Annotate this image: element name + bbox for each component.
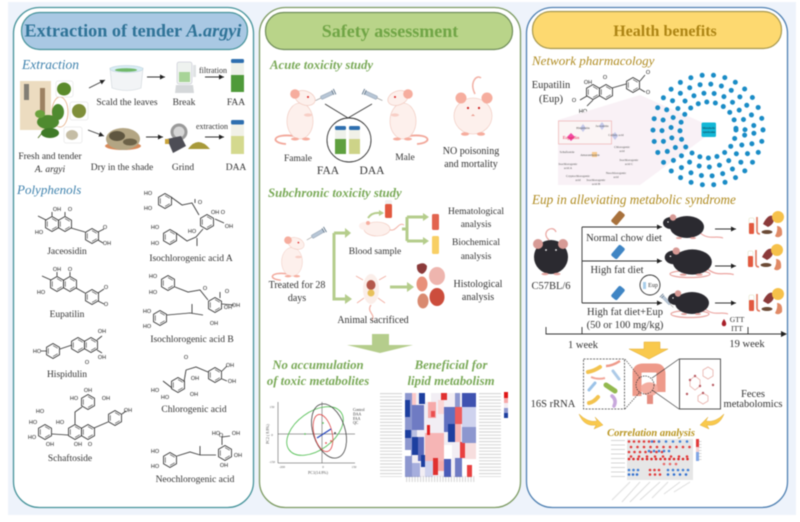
molecule: schaftoside: OH [46,442,54,448]
chart: PCA score plot: 150 [270,405,275,409]
chart: correlation heatmap [612,439,700,502]
molecule: isochlorogenic acid B: Isochlorogenic acid B [150,335,234,345]
label: histological analysis: analysis [462,292,494,303]
molecule: hispidulin: OH [98,355,106,361]
icon: intestine [636,368,661,404]
label: DAA: DAA [360,165,385,177]
label: eupatilin [532,80,571,105]
arrow: to blender [147,76,165,78]
label: hematological analysis: Hematological [448,207,504,217]
molecule: schaftoside: HO [28,435,37,441]
heatmap legend [504,392,508,418]
label: extraction with arrow [196,122,228,137]
chart: PCA score plot: 150 [352,465,357,469]
network: target rings [653,75,763,185]
molecule: eupatilin: OH [53,267,61,273]
molecule: jaceosidin: Jaceosidin [47,247,87,257]
network: highlighted eupatilin box [558,121,612,144]
molecule: isochlorogenic acid B: HO [149,290,158,296]
icon: male rat with syringe [362,88,427,144]
chart: PCA score plot: FAA [353,417,361,421]
network: compound nodes: Neochlorogenic [606,171,627,175]
molecule: schaftoside: OH [102,396,110,402]
label: high fat diet + Eup: (50 or 100 mg/kg) [587,320,664,331]
icon: dried leaves [105,128,141,150]
vial: DAA [231,120,244,154]
label: high fat diet + Eup: High fat diet+Eup [587,307,663,318]
chart: PCA score plot [265,397,365,475]
label: no poisoning: and mortality [444,159,498,170]
label: male: Male [395,153,415,163]
molecule: neochlorogenic acid: O [219,433,224,439]
network: compound nodes: acid [613,175,619,179]
network: compound nodes: acid [619,149,625,153]
heading pill: extraction [22,12,248,50]
molecule: eupatilin structure: O [646,90,651,96]
network: central hub: Metabolic [703,126,716,130]
network: compound nodes: acid [575,178,581,182]
molecule: chlorogenic acid: Chlorogenic acid [161,405,227,415]
label: FAA: FAA [317,165,340,177]
icon: organs [416,263,445,308]
network: central hub: syndrome [703,130,716,134]
molecule: isochlorogenic acid B: O [225,289,230,295]
molecule: isochlorogenic acid B: OH [224,305,232,311]
label: grind: Grind [172,163,194,173]
molecule: schaftoside: HO [36,409,45,415]
molecule: isochlorogenic acid B: HO [143,324,152,330]
label: famale: Famale [284,154,312,164]
label: fresh and tender: A. argyi [34,165,65,175]
chart: PCA score plot: DAA [353,412,361,416]
subheading: correlation analysis: Correlation analysis [607,428,695,439]
lines to vial circle [325,104,372,118]
label: animal sacrificed: Animal sacrificed [337,315,409,326]
molecule: chlorogenic acid: OH [191,376,199,382]
molecule: schaftoside: HO [56,420,65,426]
molecule: schaftoside [28,388,132,464]
subheading: lipid metabolism: lipid metabolism [407,374,495,388]
network: central hub [702,122,716,137]
icon: magnifier Eup and syringe [640,275,675,309]
icon: dissected rat [356,274,386,320]
icon: magnifier Eup and syringe: Eup [648,283,658,289]
molecule: jaceosidin: HO [35,230,44,236]
molecule: jaceosidin: OH [103,241,111,247]
chart: PCA score plot: PC1(14.8%) [308,470,329,475]
arrow: to scald [89,80,105,88]
label: high fat diet + Eup [587,307,664,331]
molecule: isochlorogenic acid A: HO [188,229,197,235]
arrow: to dry [88,130,104,136]
molecule: eupatilin structure: HO [579,109,588,115]
label: 1 week: 1 week [568,340,599,351]
chart: PCA score plot: Control [353,408,365,412]
icon: grinder and powder [165,124,210,153]
label: treated for 28 days: Treated for 28 [269,280,325,291]
subheading: no accumulation: No accumulation [271,358,364,372]
network: compound nodes: acid C [625,162,633,166]
chart: PCA score plot: -200 [279,465,285,469]
icon: female rat with syringe [276,88,336,144]
network: compound nodes [559,122,639,186]
label: no poisoning: NO poisoning [443,146,499,157]
icon: blood sample rat [359,221,404,236]
icon: blender [175,62,196,93]
icon: healthy mouse front [454,77,492,136]
label: biochemical analysis: analysis [461,252,492,262]
molecule: chlorogenic acid: HO [151,388,160,394]
heading pill: safety [266,12,512,50]
molecule: chlorogenic acid [151,355,236,415]
label: break: Break [173,98,196,108]
molecule: schaftoside: OH [74,442,82,448]
network: compound nodes: Schaftoside [560,150,575,154]
icon: treated rat with syringe [272,227,326,280]
label: FAA: FAA [227,98,245,108]
molecule: eupatilin: HO [37,290,46,296]
diet arrows [582,227,662,303]
tube: hematological [432,214,439,230]
molecule: isochlorogenic acid B: HO [149,274,158,280]
molecule: jaceosidin [35,207,111,257]
label: biochemical analysis [452,238,500,262]
label: extraction with arrow: extraction [196,122,228,131]
molecule: neochlorogenic acid: OH [232,431,240,437]
heading pill: health [532,12,782,48]
heading pill: extraction: Extraction of tender A.argyi [25,20,241,40]
network: compound nodes: Jaceosidin [595,124,609,128]
label: feces metabolomics: Feces [741,389,765,400]
label: 19 week: 19 week [729,339,765,350]
molecule: chlorogenic acid: OH [190,392,198,398]
arrow: to grinder [146,136,163,138]
icon: C57BL/6 mouse [533,229,568,275]
circle with FAA and DAA vials [327,118,371,162]
label: DAA: DAA [226,163,246,173]
box: metabolite molecules [680,359,720,409]
label: 16S rRNA: 16S rRNA [531,399,576,410]
icon: brown pill [611,210,625,226]
molecule: eupatilin: O [68,267,73,273]
subheading: no accumulation: of toxic metabolites [267,374,369,388]
molecule: hispidulin: OH [98,329,106,335]
chart: PCA score plot: 0 [271,433,273,437]
molecule: isochlorogenic acid A: OH [225,224,233,230]
arrow: curved yellow right [700,414,724,429]
label: feces metabolomics [724,389,782,410]
molecule: isochlorogenic acid A: O [198,200,203,206]
label: fresh and tender [18,152,82,175]
icon: scalding pot [110,66,143,90]
subheading: subchronic toxicity: Subchronic toxicity study [268,186,402,200]
subheading: no accumulation [267,358,369,388]
heading pill: health: Health benefits [613,23,717,40]
molecule: jaceosidin: OH [53,207,61,213]
label: histological analysis [454,279,503,303]
molecule: neochlorogenic acid: HO [212,431,221,437]
subheading: network pharmacology: Network pharmacology [531,53,655,68]
panel: extraction of tender A. argyi [14,8,254,508]
icon: black mouse normal diet [663,214,723,239]
molecule: isochlorogenic acid B: OH [210,321,218,327]
tube: biochemical [432,236,439,254]
molecule: eupatilin [37,267,109,320]
bracket arrows to tubes [402,213,429,245]
network: compound nodes: Isochlorogenic [559,162,578,166]
molecule: isochlorogenic acid A: HO [144,206,153,212]
molecule: isochlorogenic acid A: OH O [211,210,226,216]
subheading: lipid metabolism [407,358,495,388]
label: blood sample: Blood sample [349,247,401,257]
molecule: jaceosidin: O [103,225,108,231]
chart: PCA score plot: 0 [322,465,324,469]
label: treated for 28 days [269,280,325,304]
label: treated for 28 days: days [288,293,306,304]
molecule: eupatilin structure [572,70,651,115]
molecule: neochlorogenic acid: Neochlorogenic acid [156,475,235,485]
icon: blood drop and GTT ITT: ITT [731,324,743,333]
subheading: metabolic syndrome: Eup in alleviating metabolic syndrome [531,192,736,207]
molecule: eupatilin: O [104,302,109,308]
icon: blue pill bottom [611,285,625,301]
heading pill: safety: Safety assessment [322,21,458,41]
label: dry in the shade: Dry in the shade [91,163,153,173]
molecule: neochlorogenic acid [151,431,242,485]
network: compound nodes: Amaranthoside [580,153,600,157]
molecule: schaftoside: HO [70,396,79,402]
label: scald: Scald the leaves [96,98,158,108]
molecule: neochlorogenic acid: OH [234,453,242,459]
molecule: neochlorogenic acid: OH [220,463,228,469]
icon: blood drop and GTT ITT: GTT [730,315,745,324]
molecule: schaftoside: O [88,442,93,448]
timeline [546,327,787,337]
molecule: isochlorogenic acid A: HO [144,191,153,197]
molecule: eupatilin structure: O [646,70,651,76]
arrow: outcome 2 [715,265,736,267]
molecule: neochlorogenic acid: HO [151,464,160,470]
network: compound nodes: Chlorogenic [614,145,630,149]
network: compound nodes: Isochlorogenic [587,178,606,182]
panel: safety assessment [260,8,520,508]
molecule: chlorogenic acid: HO [161,395,170,401]
subheading: lipid metabolism: Beneficial for [414,358,488,372]
molecule: chlorogenic acid: OH [226,363,234,369]
molecule: hispidulin: O [85,360,90,366]
subheading: acute toxicity: Acute toxicity study [269,58,373,72]
label: eupatilin: Eupatilin [532,80,571,91]
icon: blood drop and GTT ITT [722,315,745,333]
molecule: schaftoside: OH [124,408,132,414]
organs group 3 [749,288,784,314]
label: normal chow diet: Normal chow diet [586,233,662,244]
molecule: isochlorogenic acid B: O [203,286,208,292]
small blood tube with arrow [368,200,392,218]
label: hematological analysis [448,207,504,230]
label: histological analysis: Histological [454,279,503,290]
molecule: eupatilin structure: OH [584,80,592,86]
molecule: schaftoside: Schaftoside [48,453,92,464]
molecule: isochlorogenic acid A: Isochlorogenic acid A [149,254,233,264]
molecule: eupatilin structure: O [603,75,608,81]
molecule: neochlorogenic acid: HO [151,449,160,455]
molecule: eupatilin structure: O [572,98,577,104]
organs group 1 [749,211,784,237]
molecule: schaftoside: OH [84,388,92,394]
molecule: hispidulin: Hispidulin [47,370,87,380]
network: fan of edges [558,95,708,185]
organs group 2 [748,244,783,270]
network: compound nodes: Hispidulin [576,126,590,130]
label: C57BL/6: C57BL/6 [531,281,571,292]
arrow: outcome 3 [715,302,736,304]
label: eupatilin: (Eup) [539,94,563,105]
label: hematological analysis: analysis [461,220,492,230]
icon: blue pill top [611,244,625,260]
network: compound nodes: acid B [592,182,600,186]
arrow: curved yellow left [579,414,603,429]
image: book and fresh plant [20,81,88,143]
label: filtration with arrow: filtration [199,66,227,75]
label: fresh and tender: Fresh and tender [18,152,82,162]
network: compound nodes: acid A [564,166,573,170]
arrow: big green down [347,334,413,353]
chart: PCA score plot: -150 [269,460,275,464]
vial: FAA [231,59,244,92]
molecule: chlorogenic acid: OH [228,379,236,385]
chart: PCA score plot: PC2 ( 8.8%) [265,423,270,444]
icon: black mouse high fat [665,247,734,278]
subheading: extraction: Extraction [21,57,79,72]
arrow: to organs [390,282,414,292]
molecule: jaceosidin: O [68,207,73,213]
label: biochemical analysis: Biochemical [452,238,500,248]
panel: health benefits [526,8,788,508]
molecule: eupatilin: O [104,285,109,291]
molecule: isochlorogenic acid B: OH [232,303,240,309]
network: compound nodes: Eupatilin [563,135,580,140]
label: high fat diet: High fat diet [590,265,644,276]
molecule: isochlorogenic acid A: HO [151,241,160,247]
molecule: isochlorogenic acid A [144,191,233,264]
molecule: hispidulin: HO [33,349,42,355]
label: no poisoning [443,146,499,170]
icon: black mouse Eup [668,290,728,318]
molecule: chlorogenic acid: O [184,355,189,361]
connector lines to boxes [625,359,679,409]
arrow: big yellow down [629,342,668,359]
network: compound nodes: Cryptochlorogenic [566,174,591,178]
arrow: outcome 1 [715,228,736,230]
label: feces metabolomics: metabolomics [724,399,782,410]
molecule: hispidulin [33,329,106,380]
chart: PCA score plot: QC [353,421,359,425]
molecule: eupatilin: Eupatilin [50,310,85,320]
chart: lipid heatmap [405,393,476,477]
subheading: polyphenols: Polyphenols [16,182,81,197]
box: gut bacteria [584,359,624,409]
molecule: isochlorogenic acid A: HO [151,225,160,231]
molecule: isochlorogenic acid B: HO [143,309,152,315]
network: compound nodes: Isochlorogenic [620,158,639,162]
molecule: schaftoside: HO [29,420,38,426]
molecule: isochlorogenic acid B [143,274,240,345]
network: compound nodes: Caffeic acid [608,133,624,137]
heatmap row labels [391,393,490,479]
arrow: forked green [334,228,352,304]
